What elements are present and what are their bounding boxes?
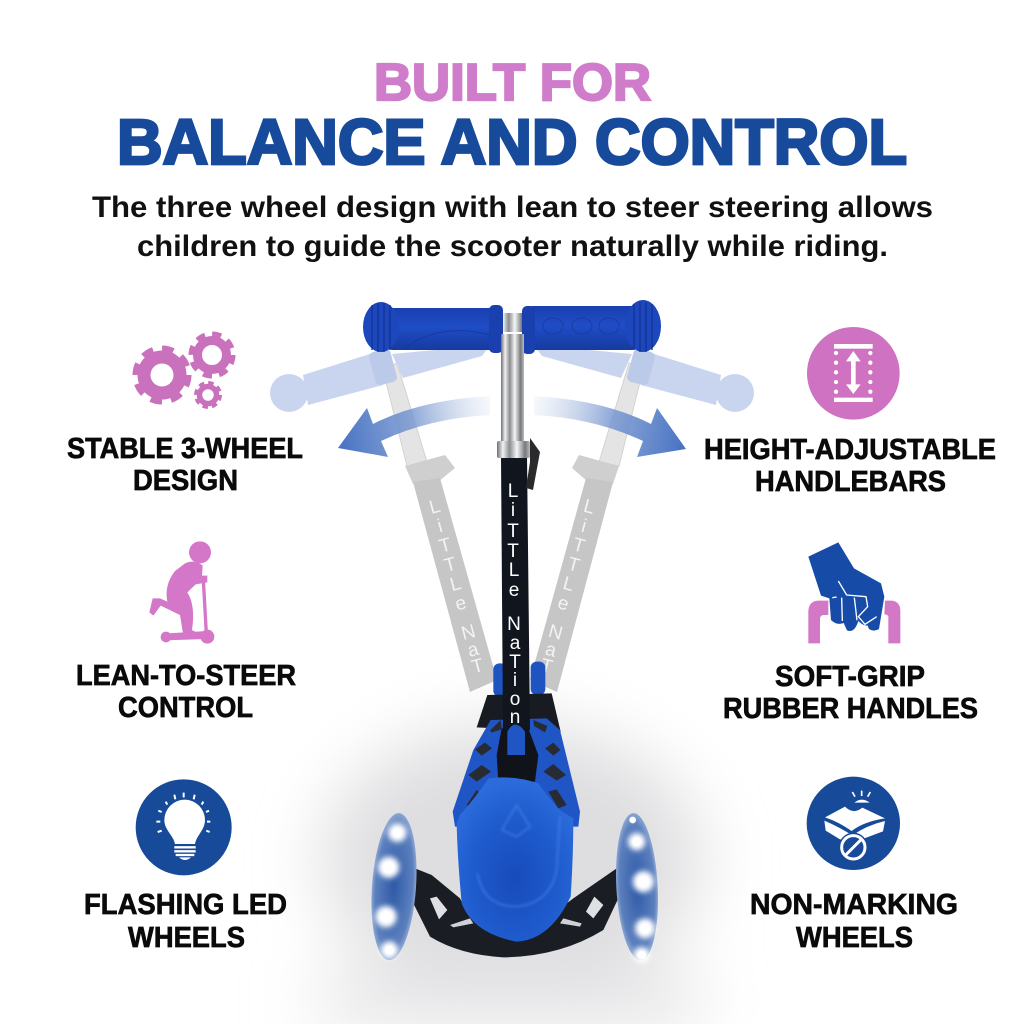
icon: hand gripping handle (808, 542, 900, 643)
rear arm (413, 868, 621, 957)
blue deck frame (453, 718, 580, 827)
chrome stem (501, 334, 524, 442)
ghost left pole (383, 363, 427, 466)
icon: child on scooter (149, 541, 214, 644)
label: stable 3-wheel design: STABLE 3-WHEEL (67, 433, 303, 465)
ghost left tube (413, 478, 497, 692)
label: soft-grip rubber handles (723, 661, 978, 725)
stem lettering: T (509, 652, 521, 673)
stem lettering: o (510, 689, 520, 710)
ghost left lettering: T (437, 534, 454, 558)
label: flashing led wheels: WHEELS (128, 922, 245, 954)
label: soft-grip rubber handles: SOFT-GRIP (775, 661, 925, 693)
ghost left clamp (405, 455, 455, 484)
subtitle: The three wheel design with lean to steer steering allows (92, 191, 933, 224)
ghost left lettering: N (459, 621, 478, 645)
title line 2: BALANCE AND CONTROL (117, 106, 907, 178)
left light-up wheel (367, 812, 421, 962)
ghost right tube (530, 478, 613, 692)
label: flashing led wheels (84, 889, 287, 954)
stem lettering: n (510, 707, 520, 728)
ghost right lettering: e (555, 592, 571, 615)
label: lean-to-steer control: CONTROL (118, 692, 253, 724)
ghost left lettering: L (427, 496, 443, 519)
subtitle (92, 191, 933, 263)
icon: non-marking surface (807, 777, 900, 870)
label: non-marking wheels: WHEELS (796, 922, 913, 954)
stem lettering: i (513, 670, 517, 691)
title line 1: BUILT FOR (374, 54, 651, 112)
right grip (522, 300, 661, 354)
ghost left lettering: L (448, 573, 463, 596)
handlebar crossbar (498, 313, 526, 332)
label: soft-grip rubber handles: RUBBER HANDLES (723, 693, 978, 725)
floor shadow around scooter (320, 725, 702, 1024)
ghost right lettering: L (561, 573, 576, 596)
arrow: lean left (338, 396, 490, 457)
title (117, 54, 907, 178)
scooter front and wheels (367, 724, 661, 963)
ghost right lettering: L (581, 496, 597, 519)
label: stable 3-wheel design (67, 433, 303, 497)
scooter rear structure (413, 662, 621, 957)
label: height-adjustable handlebars (704, 434, 996, 498)
ghost right handlebar (534, 345, 754, 412)
label: height-adjustable handlebars: HANDLEBARS (755, 466, 946, 498)
ghost left lettering: i (435, 516, 445, 537)
black lower tube (501, 456, 530, 730)
label: lean-to-steer control (76, 660, 296, 724)
ghost left lettering: e (453, 592, 469, 615)
stem lettering: T (507, 521, 519, 542)
stem lettering (507, 481, 521, 728)
label: stable 3-wheel design: DESIGN (133, 465, 238, 497)
rear black housing (477, 693, 561, 732)
ghost left lettering (426, 495, 487, 679)
ghost left handlebar (270, 345, 490, 412)
ghost right lettering: i (579, 516, 589, 537)
ghost scooter leaning right (530, 345, 754, 692)
ghost right lettering: T (570, 534, 587, 558)
right light-up wheel (613, 812, 661, 963)
ghost right lettering (537, 495, 598, 679)
hinge (497, 728, 538, 782)
ghost right lettering: T (565, 554, 582, 577)
left grip (363, 302, 503, 353)
quick release clamp (497, 438, 540, 490)
icon: height adjust (807, 327, 900, 420)
stem lettering: e (509, 580, 519, 601)
stem lettering: i (511, 500, 515, 521)
blue folding knobs (493, 662, 545, 697)
stem lettering: N (507, 614, 521, 635)
front fender (457, 777, 573, 942)
ghost right clamp (572, 455, 619, 484)
ghost right lettering: N (546, 621, 565, 645)
fender highlight (477, 805, 560, 907)
arrow: lean right (534, 396, 686, 457)
stem lettering: L (508, 481, 518, 502)
icon: light bulb (136, 779, 232, 875)
ghost left lettering: T (469, 655, 486, 678)
blue lever (507, 724, 525, 755)
ghost scooter leaning left (270, 345, 497, 692)
label: height-adjustable handlebars: HEIGHT-ADJUSTABLE (704, 434, 996, 466)
label: flashing led wheels: FLASHING LED (84, 889, 287, 921)
subtitle: children to guide the scooter naturally while riding. (137, 230, 888, 263)
stem lettering: T (507, 541, 519, 562)
stem lettering: a (510, 633, 521, 654)
ghost right lettering: T (538, 655, 555, 678)
scooter (363, 300, 661, 963)
ghost left lettering: a (465, 639, 481, 662)
label: lean-to-steer control: LEAN-TO-STEER (76, 660, 296, 692)
stem lettering: L (509, 560, 519, 581)
label: non-marking wheels (750, 889, 958, 954)
deck slots (467, 720, 567, 808)
ghost right lettering: a (543, 639, 559, 662)
icon: gears (136, 334, 232, 407)
ghost left lettering: T (442, 554, 459, 577)
ghost right pole (599, 363, 643, 466)
label: non-marking wheels: NON-MARKING (750, 889, 958, 921)
